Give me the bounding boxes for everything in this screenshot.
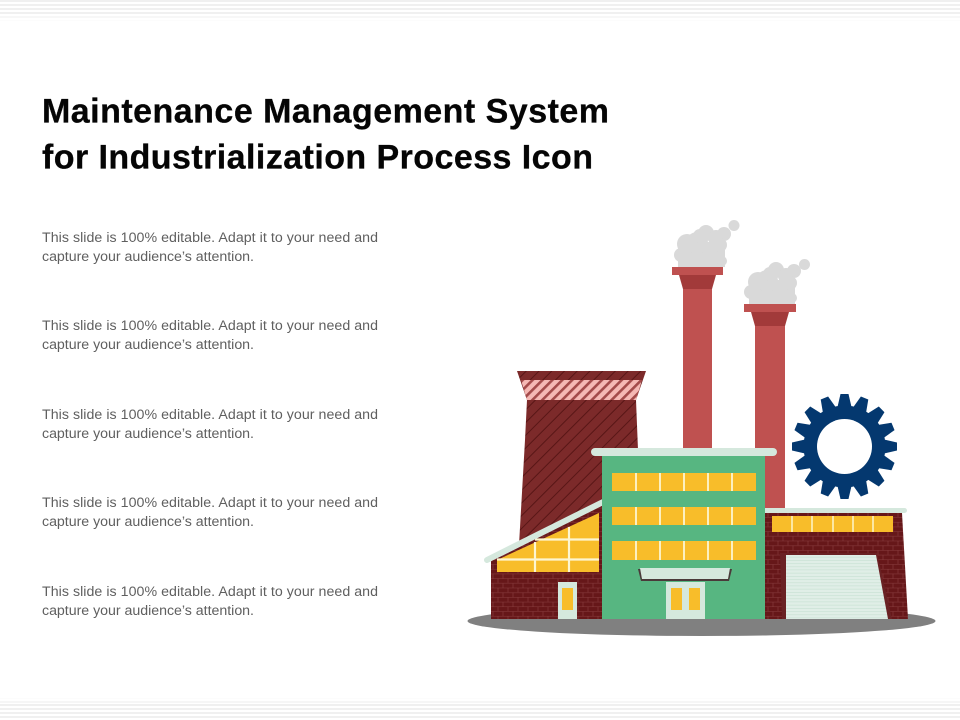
icon: gear (792, 394, 897, 499)
title: for Industrialization Process Icon (42, 138, 593, 176)
chimney right (744, 259, 810, 512)
text block 1: capture your audience’s attention. (42, 249, 254, 265)
bottom stripes (0, 698, 960, 718)
text block 5 (42, 584, 378, 619)
text block 3: This slide is 100% editable. Adapt it to your need and (42, 407, 378, 423)
text block 2: capture your audience’s attention. (42, 337, 254, 353)
cooling tower (517, 371, 646, 545)
text block 4: This slide is 100% editable. Adapt it to your need and (42, 495, 378, 511)
text block 3 (42, 407, 378, 442)
text block 1: This slide is 100% editable. Adapt it to your need and (42, 230, 378, 246)
factory illustration (468, 220, 936, 636)
title: Maintenance Management System (42, 92, 609, 130)
text block 4 (42, 495, 378, 530)
ground shadow (468, 606, 936, 636)
text block 2: This slide is 100% editable. Adapt it to your need and (42, 318, 378, 334)
text block 5: This slide is 100% editable. Adapt it to your need and (42, 584, 378, 600)
text block 3: capture your audience’s attention. (42, 426, 254, 442)
text block 5: capture your audience’s attention. (42, 603, 254, 619)
top stripes (0, 0, 960, 21)
text block 1 (42, 230, 378, 265)
right garage building (763, 508, 908, 619)
title (42, 92, 609, 176)
chimney left (672, 220, 740, 455)
central green building (591, 448, 777, 619)
text block 2 (42, 318, 378, 353)
left annex building (487, 498, 611, 619)
text block 4: capture your audience’s attention. (42, 514, 254, 530)
